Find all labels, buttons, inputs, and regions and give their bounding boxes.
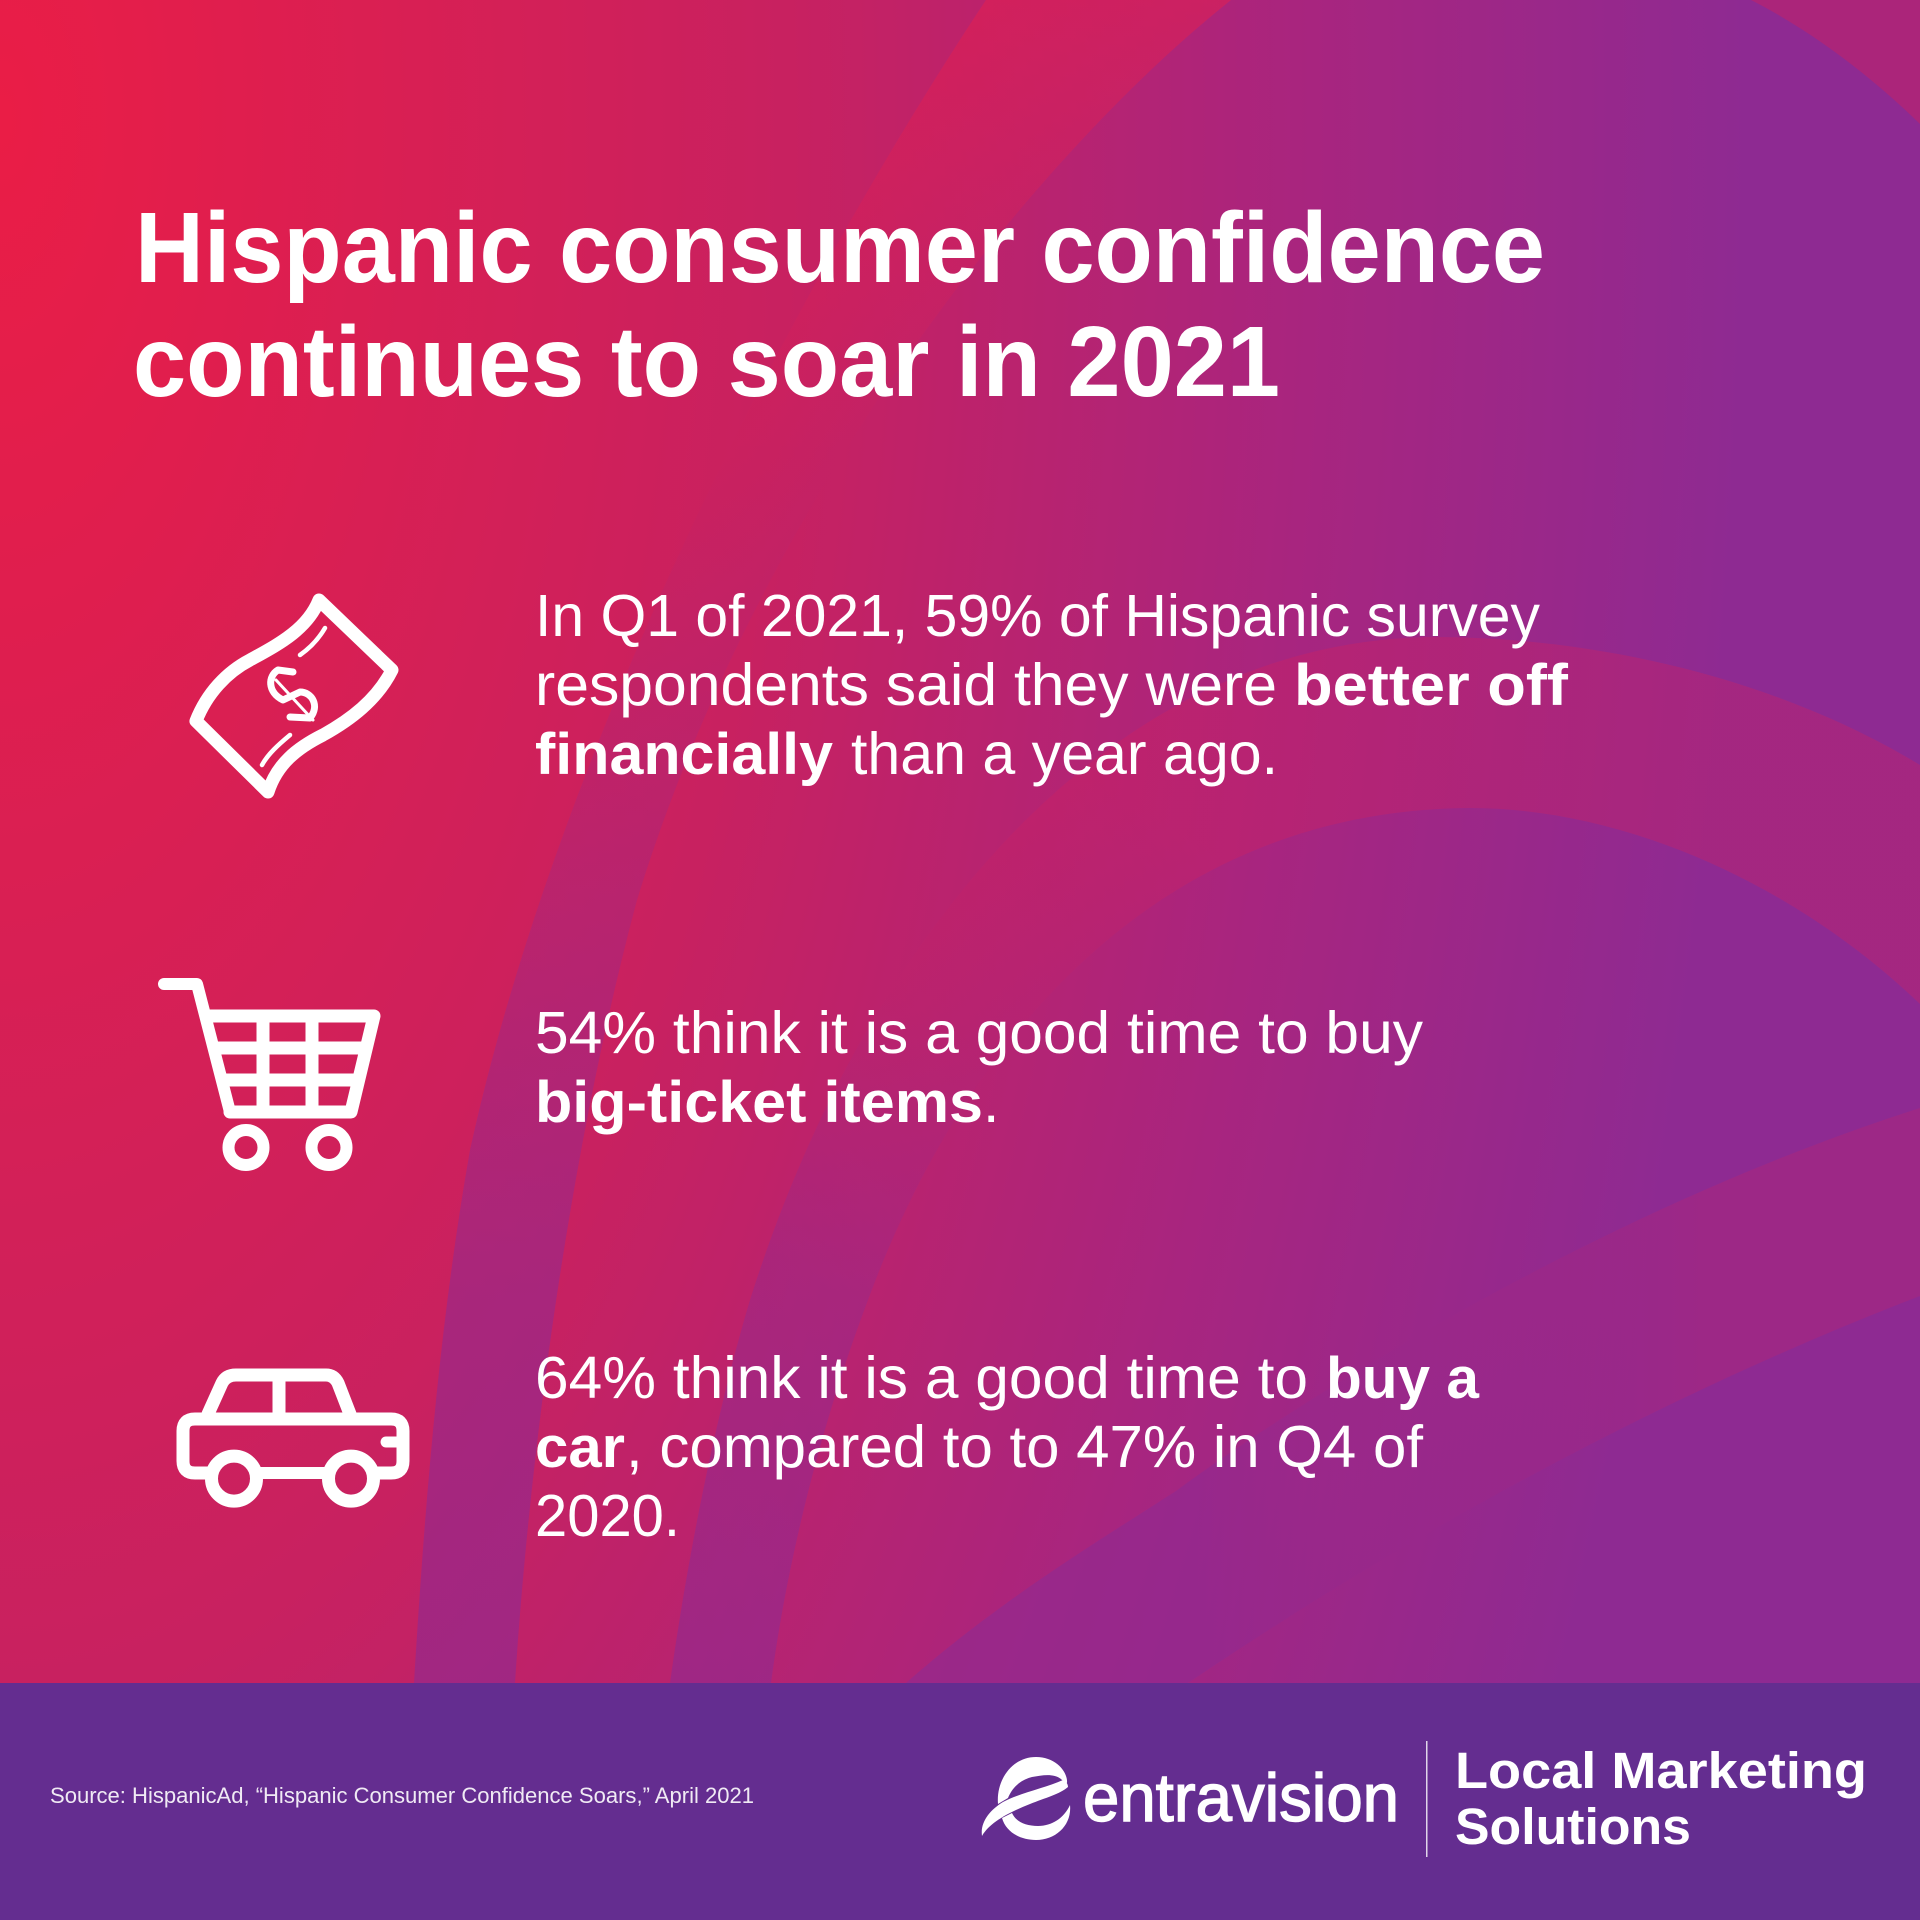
logo: entravision (982, 1757, 1399, 1840)
text: big-ticket items: 54% think it is a good time to buy (535, 1000, 1423, 1066)
footer band (0, 1683, 1920, 1920)
text: better off financially: respondents said they were (535, 652, 1277, 718)
icon: entravision e mark (982, 1757, 1070, 1840)
logo text: local marketing solutions: Solutions (1455, 1798, 1691, 1855)
text: buy a car: 2020. (535, 1483, 680, 1549)
icon: shopping cart (164, 984, 374, 1165)
logo text: local marketing solutions: Local Marketing (1455, 1742, 1867, 1799)
source note: Source: HispanicAd, “Hispanic Consumer Confidence Soars,” April 2021 (50, 1783, 754, 1808)
icon: car (183, 1375, 403, 1501)
text: buy a car: buy a (1326, 1346, 1480, 1411)
text: buy a car: , compared to to 47% in Q4 of (626, 1414, 1424, 1480)
text: big-ticket items (535, 1000, 1423, 1135)
logo text: local marketing solutions (1455, 1742, 1867, 1855)
icon: dollar bill (196, 600, 392, 792)
text: buy a car: car (535, 1415, 625, 1480)
text: better off financially: In Q1 of 2021, 59% of Hispanic survey (535, 583, 1540, 649)
title (133, 192, 1545, 418)
divider (1426, 1741, 1428, 1857)
text: big-ticket items: . (983, 1069, 999, 1135)
text: better off financially: better off (1294, 653, 1569, 718)
text: buy a car: 64% think it is a good time to (535, 1345, 1308, 1411)
text: better off financially: financially (535, 722, 833, 787)
text: better off financially (535, 583, 1569, 787)
text: better off financially: than a year ago. (851, 721, 1278, 787)
text: big-ticket items: big-ticket items (535, 1070, 983, 1135)
title: Hispanic consumer confidence (135, 192, 1545, 304)
title: continues to soar in 2021 (133, 306, 1280, 418)
text: buy a car (535, 1345, 1480, 1549)
logo: entravision: entravision (1083, 1760, 1399, 1836)
